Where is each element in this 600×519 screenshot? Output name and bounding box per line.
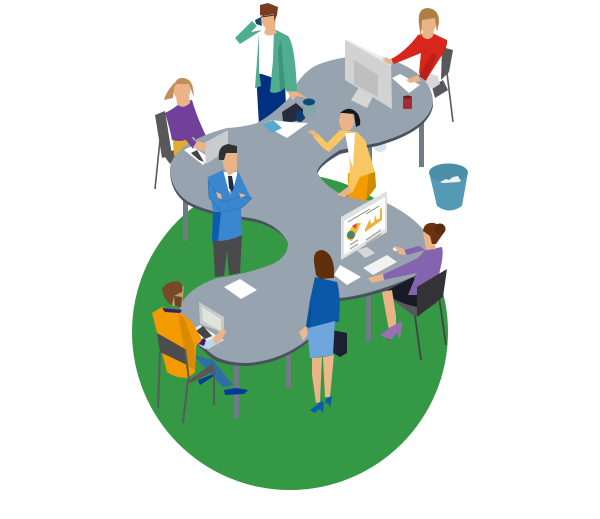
keyboard: lower right xyxy=(363,255,397,275)
camera xyxy=(282,103,305,122)
waste bin xyxy=(429,164,468,210)
chair: bearded man xyxy=(157,333,215,423)
keyboard: top xyxy=(392,74,420,93)
desktop computer: top xyxy=(345,40,392,109)
laptop: left woman xyxy=(184,130,228,165)
chair: red woman xyxy=(432,47,453,122)
person: seated woman in purple xyxy=(368,223,446,340)
desktop computer with charts: lower right xyxy=(341,191,387,260)
chair: seated woman, back xyxy=(417,269,447,317)
person: woman in purple, body xyxy=(164,78,208,156)
person: woman in red, torso and arms xyxy=(382,8,447,83)
paper and tablet xyxy=(262,120,308,138)
person: man on the phone, upper body xyxy=(235,3,307,101)
lens xyxy=(303,98,315,117)
person: woman in red, lower body xyxy=(420,72,440,89)
chair: seated woman, seat xyxy=(389,290,446,360)
person: man in blue suit xyxy=(208,144,252,277)
person: man on the phone, legs xyxy=(256,72,286,126)
green circle backdrop xyxy=(132,174,448,490)
paper: near the standing woman xyxy=(334,265,361,285)
desk top xyxy=(170,56,433,366)
person: woman in yellow blazer with orange skirt xyxy=(307,109,376,201)
mouse xyxy=(393,247,399,251)
paper: lower left desk xyxy=(224,279,257,299)
woman in purple: arm and hand on laptop xyxy=(167,116,207,152)
desk legs xyxy=(183,120,424,418)
chair: left woman xyxy=(155,111,176,189)
person: standing woman with handbag xyxy=(299,250,347,413)
red mug xyxy=(403,96,412,109)
laptop: bearded man xyxy=(195,302,224,349)
glass under desk xyxy=(374,142,386,152)
person: bearded man in orange xyxy=(152,281,248,395)
